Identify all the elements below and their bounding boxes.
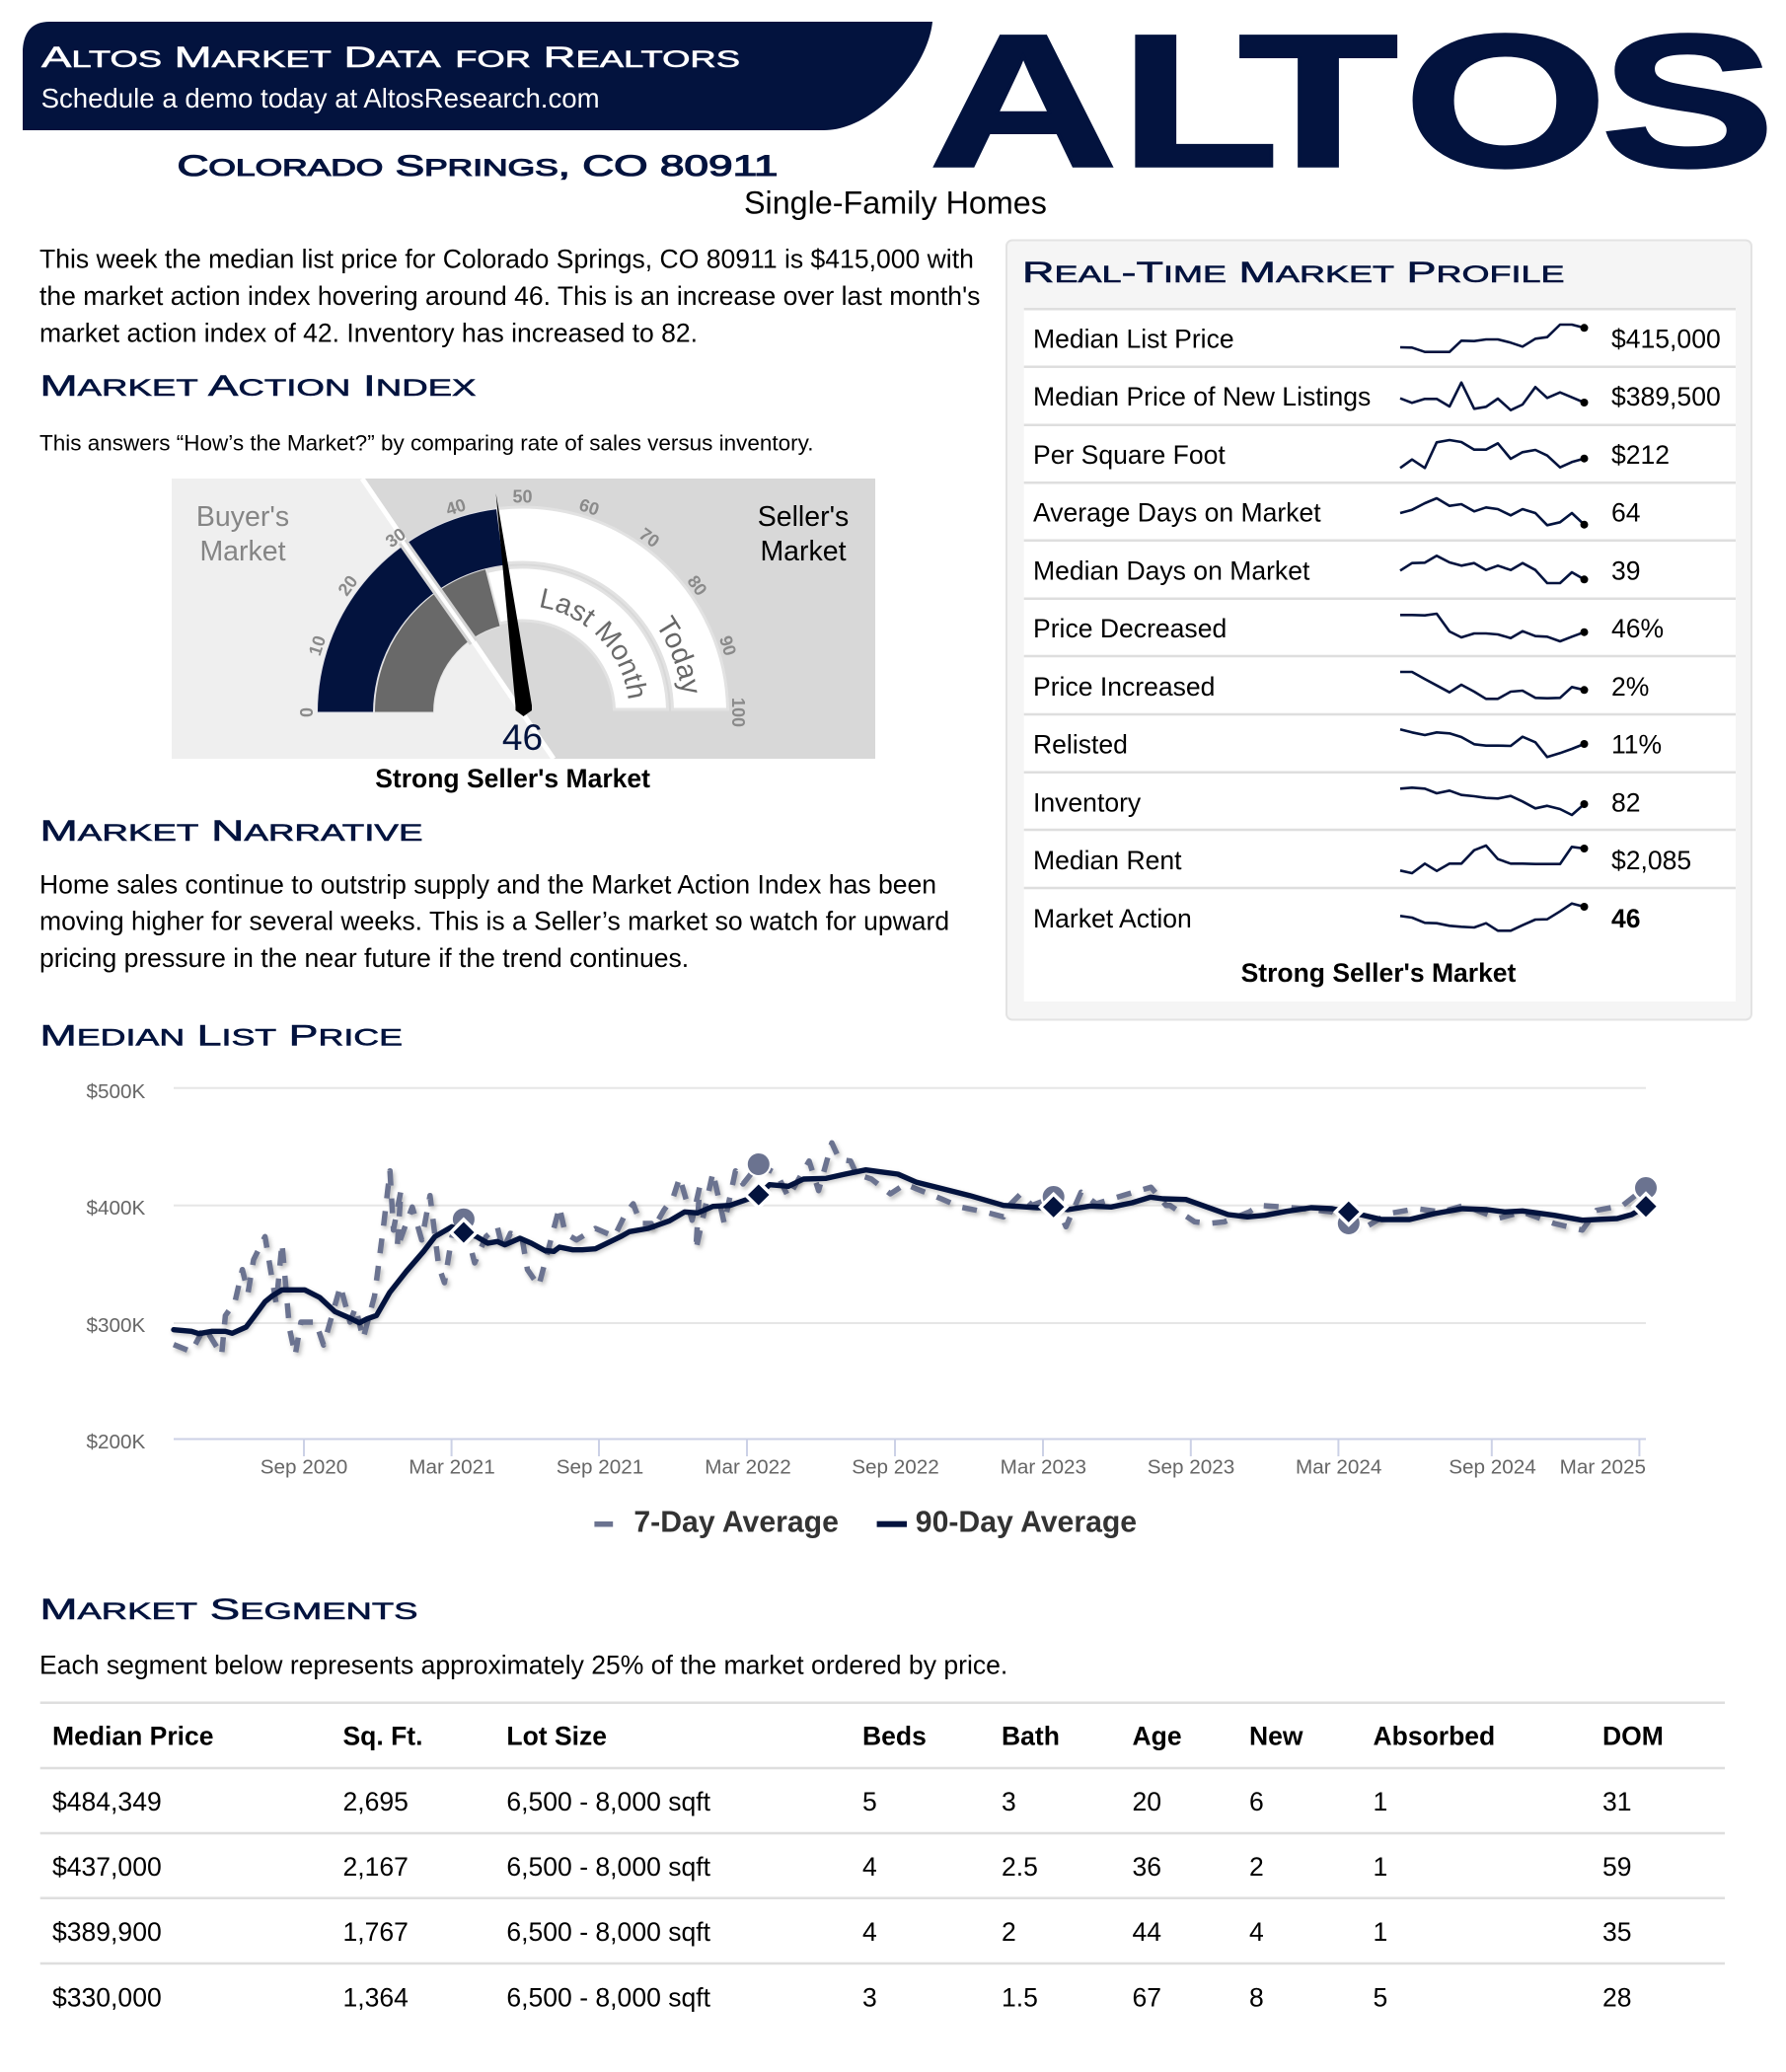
gauge: scale labels: 80 — [683, 571, 710, 599]
row: price decreased: Price Decreased — [1033, 614, 1227, 643]
table row 1: 6,500 - 8,000 sqft — [506, 1787, 711, 1816]
buyer's market label — [196, 501, 289, 567]
row: median list price — [1033, 324, 1721, 353]
row: price increased: 2% — [1611, 672, 1649, 702]
7-day markers — [452, 1152, 1658, 1235]
chart legend: 7-Day Average — [633, 1507, 839, 1539]
table row 2: 4 — [862, 1852, 877, 1882]
table row 4: 1.5 — [1002, 1982, 1038, 2012]
row: per square foot: $212 — [1611, 440, 1670, 470]
x-axis labels: Sep 2021 — [557, 1456, 643, 1478]
property type subtitle: Single-Family Homes — [744, 185, 1047, 221]
table row 4: $330,000 — [52, 1982, 162, 2012]
gauge: scale labels: 40 — [443, 494, 469, 520]
x-axis labels: Sep 2020 — [260, 1456, 347, 1478]
table row 3: 1 — [1374, 1917, 1387, 1947]
table row 3: $389,900 — [52, 1917, 162, 1947]
table row 2 — [52, 1852, 1632, 1882]
intro paragraph — [39, 245, 980, 348]
table row 4: 28 — [1602, 1982, 1632, 2012]
market action description: This answers “How’s the Market?” by comparing rate of sales versus inventory. — [39, 431, 813, 456]
row: median list price: $415,000 — [1611, 324, 1721, 353]
table row 1 — [52, 1787, 1632, 1816]
narrative paragraph: Home sales continue to outstrip supply and the Market Action Index has been — [39, 870, 936, 900]
location heading: C olorado S prings , CO 80911 — [178, 146, 778, 184]
heading: market narrative: M arket N arrative — [39, 811, 422, 849]
row: price increased: Price Increased — [1033, 672, 1215, 702]
table row 4: 67 — [1133, 1982, 1161, 2012]
y-axis labels — [87, 1080, 146, 1453]
x-axis labels: Mar 2022 — [705, 1456, 791, 1478]
gauge: scale labels: 60 — [576, 494, 602, 520]
gauge: scale labels: 20 — [335, 571, 362, 599]
row: relisted — [1033, 729, 1662, 760]
row: price decreased: 46% — [1611, 614, 1664, 643]
table row 2: 36 — [1133, 1852, 1161, 1882]
row: price decreased — [1033, 614, 1664, 643]
row: median days on market: Median Days on Market — [1033, 556, 1310, 586]
table header: Bath — [1002, 1722, 1060, 1751]
line chart: median list price — [87, 1080, 1659, 1478]
table row 1: 6 — [1249, 1787, 1264, 1816]
row: median rent: $2,085 — [1611, 846, 1691, 875]
x-axis labels: Sep 2024 — [1449, 1456, 1536, 1478]
gauge: market action index — [172, 479, 875, 759]
table row 1: 3 — [1002, 1787, 1016, 1816]
banner — [23, 22, 932, 130]
buyer's market label: Buyer's — [196, 501, 289, 533]
table header: Median Price — [52, 1722, 213, 1751]
table row 3: 35 — [1602, 1917, 1632, 1947]
gauge: today ring — [497, 507, 728, 709]
row: per square foot — [1033, 440, 1670, 470]
gauge: scale labels: 90 — [715, 633, 740, 658]
seller's market label: Seller's — [758, 501, 849, 533]
table row 1: 1 — [1374, 1787, 1387, 1816]
narrative paragraph: moving higher for several weeks. This is a Seller’s market so watch for upward — [39, 907, 949, 936]
y-axis labels: $400K — [87, 1197, 146, 1220]
y-axis labels: $500K — [87, 1080, 146, 1103]
table row 3: 44 — [1133, 1917, 1161, 1947]
table row 2: 6,500 - 8,000 sqft — [506, 1852, 711, 1882]
table row 2: 2 — [1249, 1852, 1264, 1882]
table row 1: 31 — [1602, 1787, 1632, 1816]
x-axis labels: Sep 2022 — [852, 1456, 939, 1478]
table header: Beds — [862, 1722, 927, 1751]
seller's market label — [758, 501, 849, 567]
logo: ALTOS wordmark: ALTOS — [929, 0, 1775, 207]
table header: Absorbed — [1374, 1722, 1495, 1751]
gauge: scale labels — [297, 486, 748, 727]
table row 3: 1,767 — [343, 1917, 409, 1947]
table row 4: 1,364 — [343, 1982, 409, 2012]
row: median rent: Median Rent — [1033, 846, 1182, 875]
table: market segments — [40, 1703, 1725, 2012]
heading: market segments: M arket S egments — [39, 1590, 418, 1627]
row: market action — [1033, 903, 1640, 933]
row: median list price: Median List Price — [1033, 324, 1234, 353]
table row 2: $437,000 — [52, 1852, 162, 1882]
gauge: scale labels: 0 — [297, 707, 317, 717]
row: average days on market — [1033, 498, 1641, 529]
row: market action: 46 — [1611, 904, 1640, 933]
gauge: scale labels: 30 — [382, 524, 409, 552]
gauge: last month value arc — [375, 569, 500, 712]
table header: New — [1249, 1722, 1303, 1751]
x-axis labels: Mar 2024 — [1296, 1456, 1381, 1478]
90-day markers — [451, 1182, 1659, 1245]
row: average days on market: Average Days on Market — [1033, 498, 1321, 528]
gauge: last month label: Last Month — [541, 588, 647, 699]
y-axis labels: $300K — [87, 1314, 146, 1337]
table row 4: 8 — [1249, 1982, 1264, 2012]
chart legend — [594, 1507, 1137, 1539]
table row 3: 4 — [862, 1917, 877, 1947]
intro paragraph: This week the median list price for Colorado Springs, CO 80911 is $415,000 with — [39, 245, 974, 274]
gauge: today label: Today — [659, 614, 697, 693]
series: 90-day average — [174, 1170, 1646, 1334]
gauge: scale labels: 70 — [635, 524, 663, 552]
narrative paragraph: pricing pressure in the near future if the trend continues. — [39, 943, 689, 973]
gauge: scale labels: 10 — [305, 633, 330, 658]
row: median rent — [1033, 845, 1691, 875]
table row 1: 20 — [1133, 1787, 1161, 1816]
gauge: scale labels: 100 — [728, 698, 748, 727]
gauge: needle — [496, 493, 532, 716]
intro paragraph: the market action index hovering around 46. This is an increase over last month's — [39, 281, 980, 311]
table header: Lot Size — [506, 1722, 607, 1751]
table row 4 — [52, 1982, 1632, 2012]
gauge: current value: 46 — [502, 717, 543, 758]
row: market action: Market Action — [1033, 904, 1192, 933]
row: inventory: Inventory — [1033, 787, 1142, 817]
panel status label: Strong Seller's Market — [1241, 958, 1517, 988]
row: inventory — [1033, 787, 1641, 817]
table row 4: 6,500 - 8,000 sqft — [506, 1982, 711, 2012]
table row 2: 1 — [1374, 1852, 1387, 1882]
row: inventory: 82 — [1611, 787, 1641, 817]
x-axis labels — [260, 1456, 1646, 1478]
table header — [52, 1722, 1664, 1751]
row: relisted: 11% — [1611, 730, 1662, 760]
table header: Age — [1133, 1722, 1182, 1751]
seller's market label: Market — [760, 536, 847, 567]
table row 3: 4 — [1249, 1917, 1264, 1947]
table row 2: 59 — [1602, 1852, 1632, 1882]
gauge: scale labels: 50 — [512, 486, 533, 506]
table row 4: 5 — [1374, 1982, 1387, 2012]
row: average days on market: 64 — [1611, 498, 1641, 528]
row: median price of new listings: $389,500 — [1611, 382, 1721, 411]
banner: Schedule a demo today at AltosResearch.com — [41, 83, 600, 113]
x-axis labels: Mar 2021 — [409, 1456, 495, 1478]
series: 7-day average — [174, 1143, 1646, 1355]
x-axis labels: Mar 2023 — [1001, 1456, 1086, 1478]
market segments description: Each segment below represents approximately 25% of the market ordered by price. — [39, 1651, 1007, 1680]
row: relisted: Relisted — [1033, 730, 1128, 760]
heading: median list price: M edian L ist P rice — [39, 1016, 403, 1054]
row: median price of new listings — [1033, 382, 1721, 411]
gauge status label: Strong Seller's Market — [375, 764, 650, 793]
banner title: A ltos M arket D ata for R ealtors — [41, 37, 740, 75]
table header: Sq. Ft. — [343, 1722, 422, 1751]
table row 1: 5 — [862, 1787, 877, 1816]
x-axis labels: Mar 2025 — [1560, 1456, 1646, 1478]
table row 1: 2,695 — [343, 1787, 409, 1816]
table row 2: 2,167 — [343, 1852, 409, 1882]
table row 4: 3 — [862, 1982, 877, 2012]
row: median price of new listings: Median Price of New Listings — [1033, 382, 1371, 411]
table row 2: 2.5 — [1002, 1852, 1038, 1882]
row: median days on market — [1033, 555, 1641, 586]
row: price increased — [1033, 672, 1649, 702]
panel heading: R eal -T ime M arket P rofile — [1022, 253, 1565, 290]
gauge: today value arc — [318, 509, 504, 712]
y-axis labels: $200K — [87, 1431, 146, 1453]
table row 3 — [52, 1917, 1632, 1947]
chart legend: 90-Day Average — [916, 1507, 1137, 1539]
table row 3: 6,500 - 8,000 sqft — [506, 1917, 711, 1947]
buyer's market label: Market — [199, 536, 286, 567]
panel: real-time market profile — [1006, 241, 1751, 1020]
intro paragraph: market action index of 42. Inventory has increased to 82. — [39, 319, 698, 348]
x-axis labels: Sep 2023 — [1148, 1456, 1234, 1478]
narrative paragraph — [39, 870, 949, 973]
table header: DOM — [1602, 1722, 1664, 1751]
row: per square foot: Per Square Foot — [1033, 440, 1226, 470]
table row 3: 2 — [1002, 1917, 1016, 1947]
table row 1: $484,349 — [52, 1787, 162, 1816]
row: median days on market: 39 — [1611, 556, 1641, 586]
heading: market action index: M arket A ction I ndex — [39, 366, 476, 404]
gauge: last month ring — [486, 567, 667, 709]
